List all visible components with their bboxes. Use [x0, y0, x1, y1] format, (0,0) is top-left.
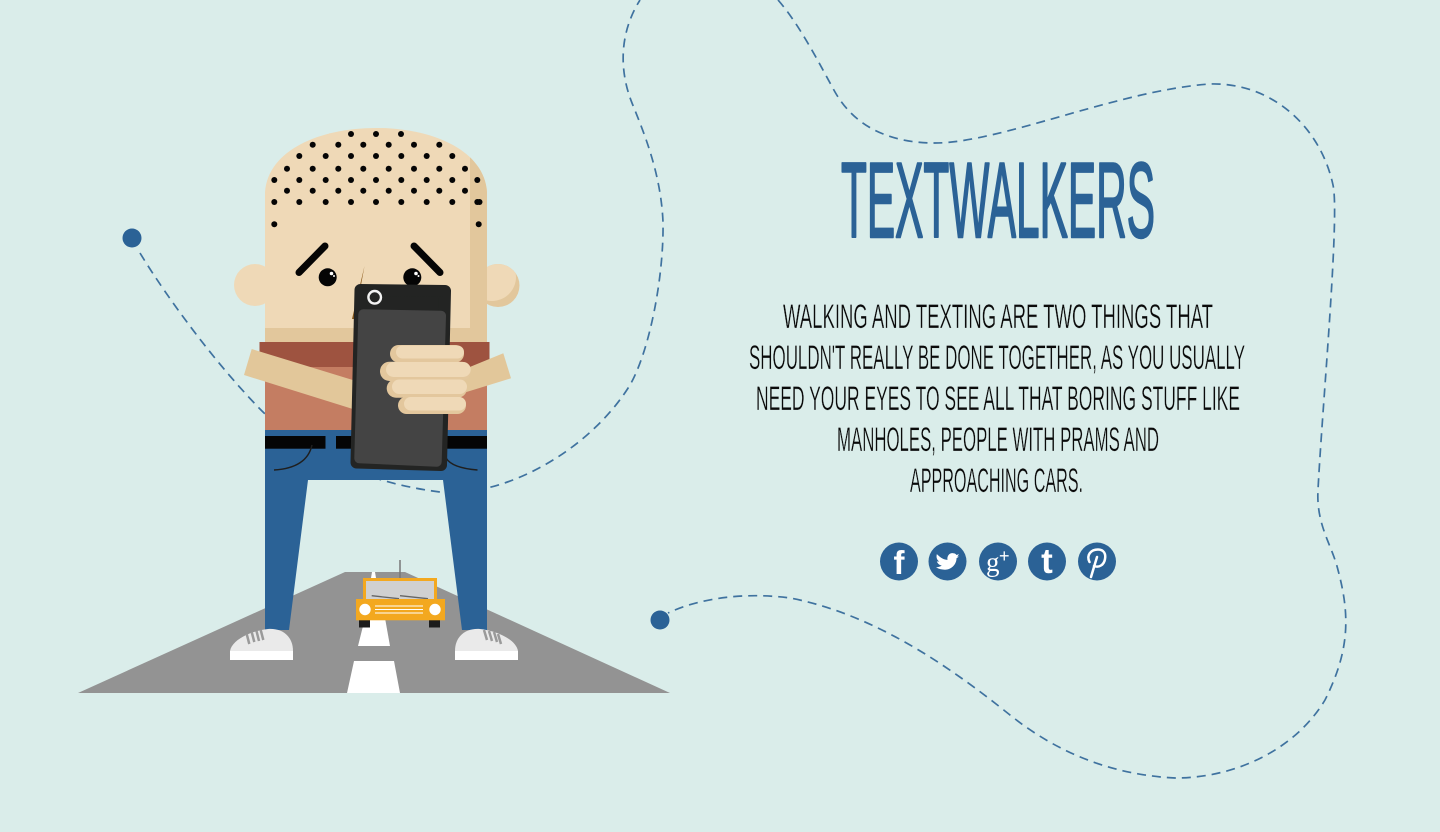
pockets [274, 445, 478, 470]
phone [356, 290, 445, 465]
ear: right [487, 264, 520, 307]
icon: tumblr [1028, 542, 1066, 581]
shoe: left [230, 629, 293, 660]
icon: google plus: g [986, 547, 1000, 577]
belt [265, 436, 487, 449]
social icons [880, 542, 1116, 581]
dashed route line [140, 0, 1346, 778]
intro text [749, 298, 1245, 500]
road [78, 572, 670, 693]
shoe: right [455, 629, 518, 660]
shirt [260, 342, 490, 431]
arm: right [460, 353, 511, 394]
arm: left [244, 349, 356, 410]
head [265, 128, 487, 342]
jeans [265, 430, 487, 630]
icon: google plus [979, 542, 1017, 580]
icon: facebook [880, 542, 918, 581]
icon: twitter [928, 542, 966, 580]
eyebrows [299, 246, 440, 272]
eyes [319, 268, 421, 286]
route end dot [650, 610, 670, 630]
intro text: APPROACHING CARS. [910, 462, 1083, 500]
icon: tumblr: t [1041, 542, 1053, 581]
icon: pinterest [1078, 542, 1116, 580]
icon: google plus: + [999, 546, 1010, 566]
hand [380, 345, 471, 414]
nose crack [352, 266, 364, 319]
hair dots [271, 131, 482, 227]
person illustration [230, 120, 520, 660]
route start dot [122, 228, 142, 248]
car [356, 560, 445, 628]
ear: left [234, 264, 276, 306]
icon: facebook: f [894, 544, 906, 581]
